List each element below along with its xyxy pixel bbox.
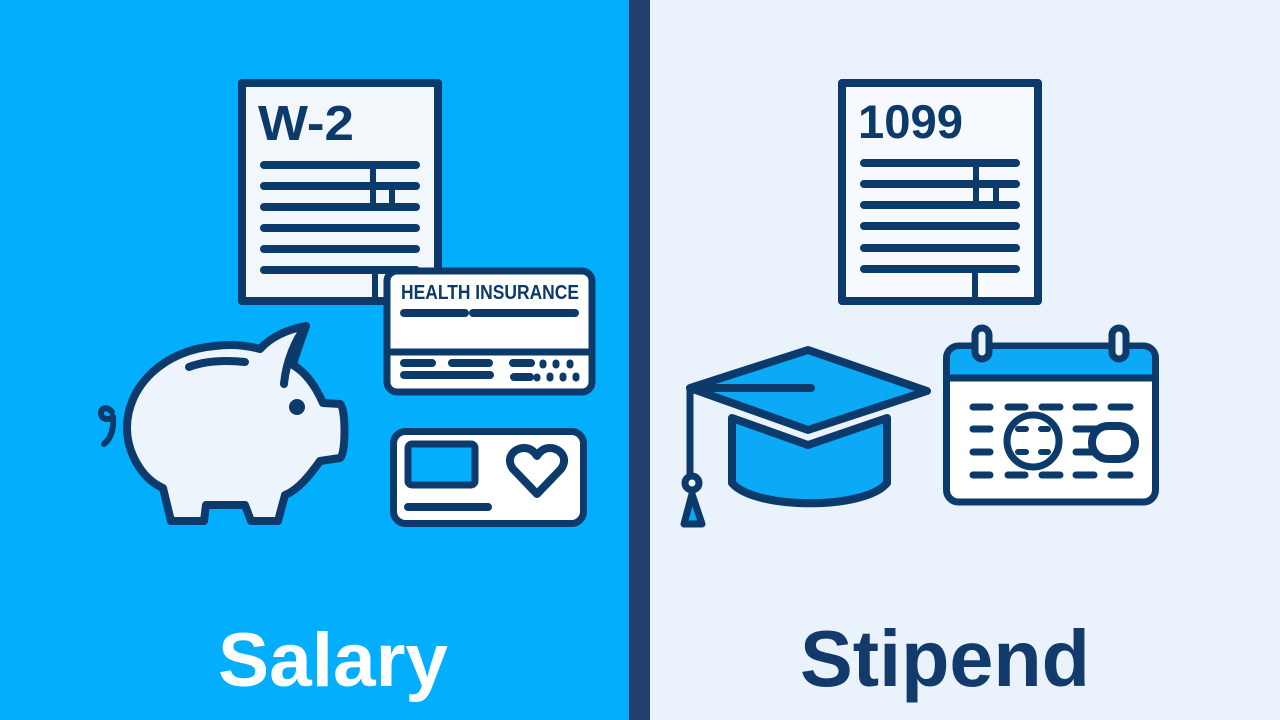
icon: graduation cap — [684, 350, 927, 524]
calendar pill — [1092, 426, 1135, 459]
cap base — [732, 418, 887, 503]
icon: piggy bank — [101, 326, 344, 521]
icon: calendar — [946, 328, 1156, 502]
tassel knot — [685, 476, 699, 490]
panel: stipend background — [650, 0, 1280, 720]
piggy eye — [289, 399, 305, 415]
1099 form title: 1099 — [858, 95, 963, 148]
benefits card heart — [510, 448, 564, 494]
icon: W-2 form — [242, 83, 438, 301]
calendar binding rings — [975, 328, 989, 359]
center divider — [629, 0, 650, 720]
piggy tail — [101, 408, 113, 444]
health insurance card lines — [404, 309, 575, 317]
icon: benefits card with heart — [394, 432, 584, 524]
heading: Salary: Salary — [218, 618, 448, 703]
W-2 form lines — [264, 165, 416, 270]
cap board — [690, 350, 927, 430]
1099 form lines — [864, 163, 1016, 269]
health insurance card title: HEALTH INSURANCE — [401, 282, 579, 304]
tassel cord — [686, 388, 694, 478]
benefits card line — [408, 503, 488, 511]
calendar header — [950, 349, 1152, 378]
W-2 form box dividers — [373, 165, 392, 301]
tassel — [684, 494, 702, 524]
icon: health insurance card — [384, 271, 592, 392]
W-2 form title: W-2 — [258, 97, 354, 151]
1099 form box dividers — [975, 163, 996, 301]
icon: 1099 form — [842, 83, 1038, 301]
heading: Stipend: Stipend — [800, 614, 1090, 703]
piggy ear fold — [284, 326, 306, 384]
piggy coin slot — [189, 361, 245, 367]
panel: salary background — [0, 0, 630, 720]
cap button line — [692, 384, 811, 392]
benefits card photo box — [408, 444, 475, 485]
calendar plus circle — [1007, 415, 1059, 467]
calendar date dashes — [973, 407, 1130, 475]
